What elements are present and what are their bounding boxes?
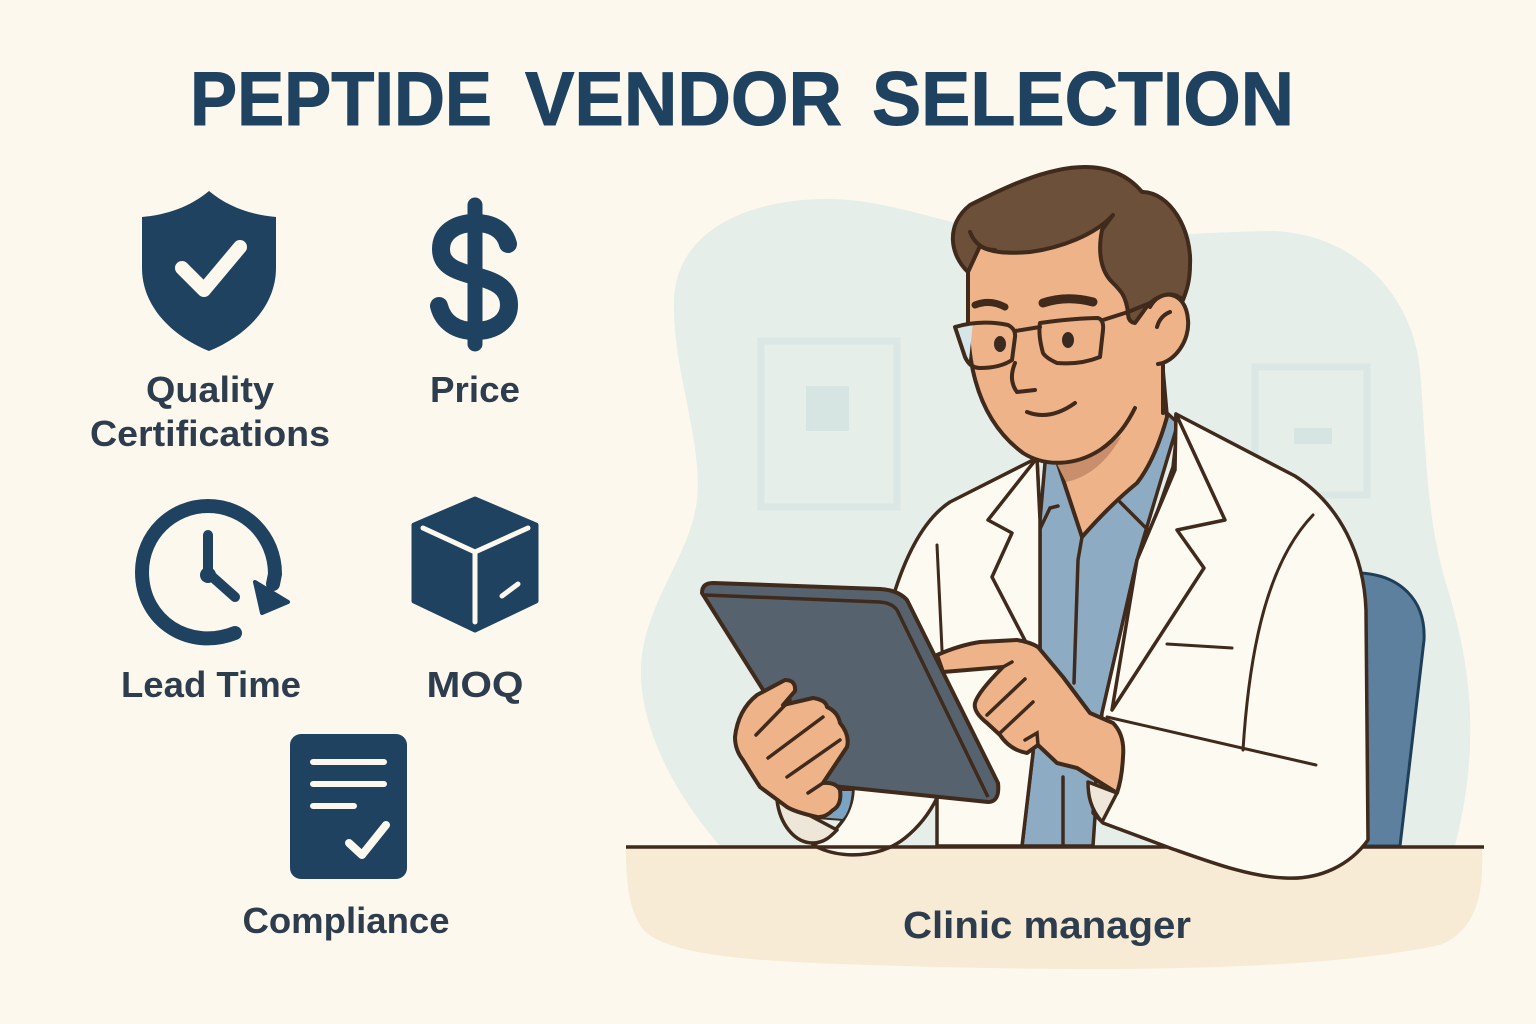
coat lapels [988, 458, 1040, 650]
label: clinic manager: Clinic manager [903, 905, 1191, 947]
desk [626, 848, 1482, 969]
shirt [1022, 413, 1178, 846]
label: price: Price [430, 369, 520, 410]
label: quality certifications [90, 369, 330, 454]
right hand [937, 640, 1123, 793]
shirt collar and placket [1038, 423, 1178, 846]
face: glasses, eyes, mouth [955, 299, 1150, 415]
label: quality certifications: Certifications [90, 413, 330, 454]
chair [1340, 573, 1424, 846]
head [968, 220, 1188, 463]
coat details [937, 515, 1316, 765]
blue shirt cuff [817, 790, 853, 820]
title [190, 57, 1294, 142]
title: VENDOR [525, 57, 842, 142]
label: compliance: Compliance [242, 900, 450, 941]
wall frames [761, 341, 1367, 507]
left cuff [777, 800, 837, 843]
coat right side and sleeve [1093, 414, 1368, 878]
tablet [702, 583, 998, 802]
left hand [735, 680, 848, 817]
icon: MOQ box [414, 499, 536, 630]
background blob [641, 199, 1470, 846]
label: MOQ: MOQ [426, 664, 524, 705]
desk edge [626, 845, 1484, 849]
icon: quality shield [142, 191, 276, 351]
hair [953, 167, 1190, 323]
illustration: clinic manager scene [626, 167, 1484, 969]
title: SELECTION [872, 57, 1294, 142]
icon: price dollar [439, 205, 509, 344]
right cuff [1088, 782, 1117, 822]
neck [1050, 360, 1167, 537]
icon: compliance document [290, 734, 407, 879]
coat left side and sleeve [813, 458, 1040, 855]
label: quality certifications: Quality [146, 369, 274, 410]
title: PEPTIDE [190, 57, 492, 142]
icon: lead time clock [142, 506, 288, 638]
label: lead time: Lead Time [121, 664, 301, 705]
